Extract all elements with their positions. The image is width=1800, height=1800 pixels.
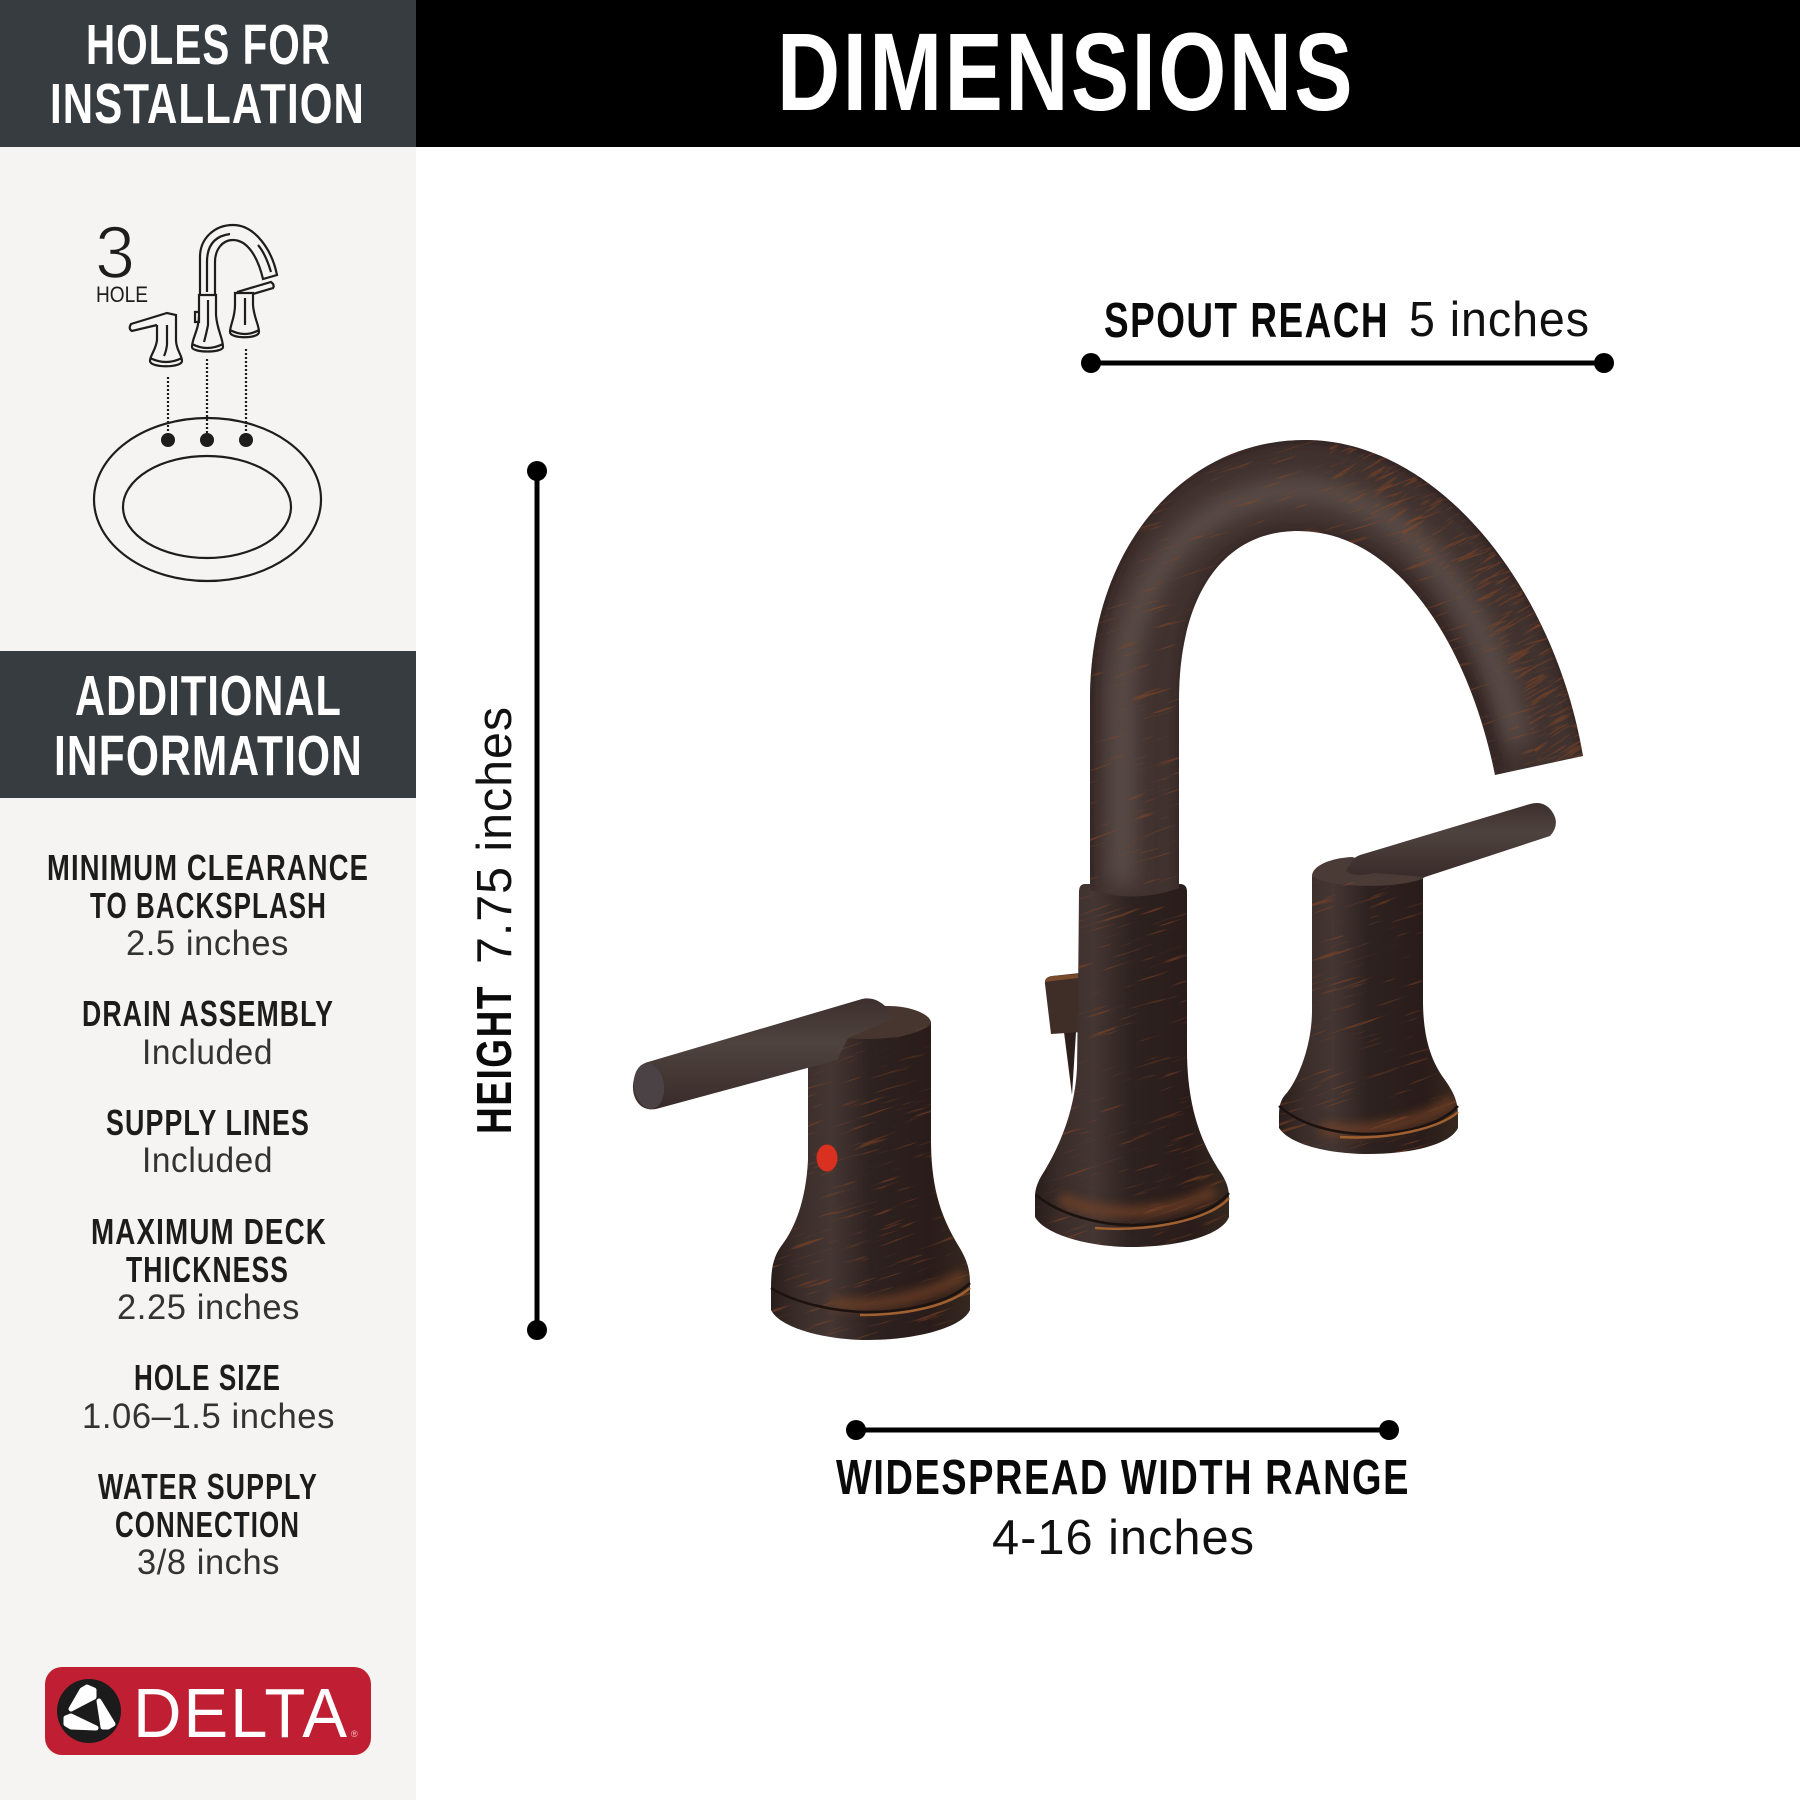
- dimension: spout reach: [1081, 293, 1614, 373]
- logo: delta: DELTA: [133, 1674, 349, 1752]
- icon: line-art center body: [192, 295, 223, 352]
- heading: holes for installation: [0, 0, 416, 147]
- left handle cap: [848, 1006, 931, 1039]
- heading: holes for installation: INSTALLATION: [50, 72, 365, 136]
- icon: line-art left handle: [130, 313, 182, 366]
- heading: holes for installation: HOLES FOR: [86, 13, 331, 77]
- arrow: width measure line: [846, 1420, 1399, 1440]
- spec: supply lines: Included: [142, 1141, 273, 1180]
- logo: delta: [45, 1667, 371, 1755]
- pop-up drain lift rod: [1045, 973, 1082, 1095]
- heading: additional information: ADDITIONAL: [75, 664, 342, 728]
- spout: [1086, 436, 1590, 897]
- spec: maximum deck thickness: THICKNESS: [126, 1249, 289, 1290]
- dimension: widespread width range: [836, 1420, 1410, 1565]
- spec: hole size: HOLE SIZE: [134, 1357, 281, 1398]
- spec: maximum deck thickness: MAXIMUM DECK: [91, 1211, 327, 1252]
- left handle: [631, 998, 970, 1340]
- spec: maximum deck thickness: [91, 1211, 327, 1327]
- spec: water supply connection: WATER SUPPLY: [98, 1466, 318, 1507]
- arrow: height measure line: [527, 461, 547, 1340]
- label: 3 hole: 3: [95, 211, 135, 294]
- left sidebar panel: [0, 0, 416, 1800]
- mounting holes: [161, 433, 253, 447]
- brushed copper streak texture: [772, 440, 1577, 1340]
- spec: drain assembly: [82, 993, 334, 1072]
- title banner: dimensions: [416, 0, 1800, 147]
- center faucet body: [1035, 884, 1229, 1247]
- dimension: height: HEIGHT: [468, 985, 522, 1134]
- title banner: dimensions: DIMENSIONS: [777, 11, 1355, 134]
- spec: hole size: [82, 1357, 335, 1436]
- dimension: widespread width range: WIDESPREAD WIDTH RANGE: [836, 1451, 1410, 1505]
- spec: supply lines: [106, 1102, 310, 1180]
- left lever: [633, 998, 895, 1109]
- arrow: spout reach measure line: [1081, 353, 1614, 373]
- heading: additional information: [0, 651, 416, 798]
- spec: water supply connection: 3/8 inchs: [137, 1543, 280, 1582]
- spec: maximum deck thickness: 2.25 inches: [117, 1288, 300, 1327]
- label: 3 hole: [95, 211, 148, 307]
- spec: drain assembly: Included: [142, 1033, 273, 1072]
- logo: delta: ®: [351, 1729, 358, 1739]
- dimension: spout reach: SPOUT REACH: [1104, 294, 1389, 348]
- spec: minimum clearance: [47, 847, 369, 963]
- heading: additional information: INFORMATION: [54, 724, 363, 788]
- right handle: [1279, 803, 1556, 1154]
- dimension: widespread width range: 4-16 inches: [992, 1511, 1255, 1565]
- spec: minimum clearance: TO BACKSPLASH: [90, 885, 327, 926]
- label: 3 hole: HOLE: [96, 282, 148, 307]
- spec: minimum clearance: MINIMUM CLEARANCE: [47, 847, 369, 888]
- spec: hole size: 1.06–1.5 inches: [82, 1397, 335, 1436]
- base seams: [771, 1100, 1458, 1315]
- icon: line-art right handle: [230, 282, 274, 337]
- dimension: height: 7.75 inches: [468, 706, 522, 964]
- spec: minimum clearance: 2.5 inches: [126, 924, 289, 963]
- icon: 3 hole faucet and sink diagram: [94, 211, 321, 581]
- sink bowl outlines: [94, 418, 321, 581]
- right lever: [1346, 803, 1556, 877]
- spec: supply lines: SUPPLY LINES: [106, 1102, 310, 1143]
- spec: water supply connection: [98, 1466, 318, 1582]
- dimension: height: [468, 461, 547, 1340]
- red hot indicator dot: [816, 1144, 838, 1172]
- spec: water supply connection: CONNECTION: [115, 1504, 300, 1545]
- right handle cap: [1312, 857, 1425, 886]
- dimension: spout reach: 5 inches: [1409, 293, 1590, 347]
- dotted guide lines: [168, 349, 246, 440]
- faucet product image: [632, 440, 1583, 1340]
- spec: drain assembly: DRAIN ASSEMBLY: [82, 993, 334, 1034]
- icon: line-art spout: [200, 225, 277, 295]
